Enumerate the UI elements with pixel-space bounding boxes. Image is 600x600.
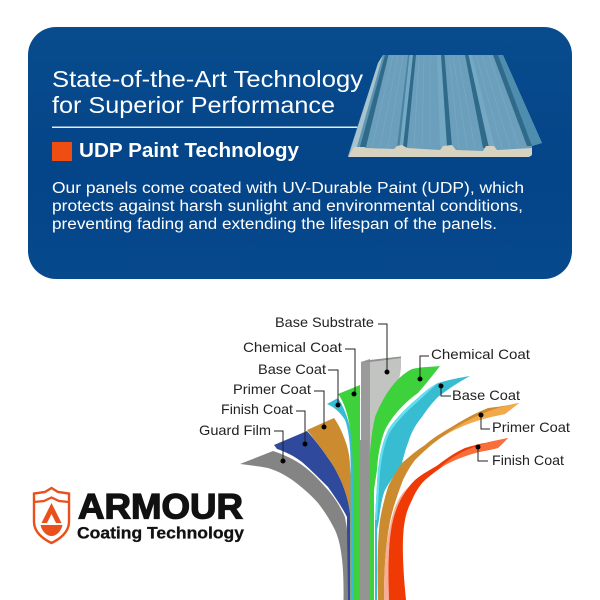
text block: description: preventing fading and extending the lifespan of the panels. xyxy=(52,216,497,233)
callout: Finish Coat left: Finish Coat xyxy=(221,401,293,417)
layer: chemical coat right xyxy=(369,366,440,600)
illustration: roof panel xyxy=(348,55,542,157)
layer: primer coat left xyxy=(307,418,352,600)
panel: UDP paint technology xyxy=(28,27,572,279)
wordmark: Coating Technology: Coating Technology xyxy=(77,524,245,542)
callout: Base Coat right xyxy=(438,384,520,403)
wordmark: ARMOUR: ARMOUR xyxy=(78,488,243,526)
callout: Chemical Coat right: Chemical Coat xyxy=(431,346,530,362)
callout: Primer Coat left xyxy=(233,381,326,430)
callout: Primer Coat right: Primer Coat xyxy=(492,419,570,435)
layer: chemical coat left xyxy=(338,385,360,600)
text block: description: Our panels come coated with UV-Durable Paint (UDP), which xyxy=(52,180,524,197)
callout: Guard Film xyxy=(199,422,286,464)
heading: panel title: State-of-the-Art Technology xyxy=(52,66,364,92)
callout: Primer Coat left: Primer Coat xyxy=(233,381,311,397)
ribs xyxy=(357,55,542,148)
heading: panel title: for Superior Performance xyxy=(52,92,335,118)
icon: shield xyxy=(34,488,69,543)
callout: Base Coat left: Base Coat xyxy=(258,361,326,377)
chart: coating layers diagram xyxy=(199,314,570,600)
callout: Base Coat left xyxy=(258,361,340,408)
callout: Finish Coat right: Finish Coat xyxy=(492,452,564,468)
layer: finish coat right xyxy=(384,438,508,600)
callout: Finish Coat right xyxy=(476,444,564,468)
callout: Chemical Coat left xyxy=(243,339,356,396)
callout: Finish Coat left xyxy=(221,401,308,446)
callout: Chemical Coat left: Chemical Coat xyxy=(243,339,342,355)
heading: panel title xyxy=(52,66,364,118)
callout: Base Coat right: Base Coat xyxy=(452,387,520,403)
layer: guard film xyxy=(240,451,348,600)
layer: base coat left xyxy=(327,398,353,600)
divider line xyxy=(52,126,360,128)
layer: primer coat right xyxy=(378,403,519,600)
icon: orange square xyxy=(52,142,72,161)
callout: Base Substrate: Base Substrate xyxy=(275,314,374,330)
callout: Guard Film: Guard Film xyxy=(199,422,271,438)
callout: Primer Coat right xyxy=(478,412,570,435)
text block: description xyxy=(52,180,524,233)
logo: Armour Coating Technology xyxy=(34,488,245,543)
layer: base coat right xyxy=(375,376,470,600)
layer: finish coat left xyxy=(274,431,350,600)
callout: Chemical Coat right xyxy=(418,346,530,382)
callout: Base Substrate xyxy=(275,314,390,374)
heading: UDP Paint Technology: UDP Paint Technology xyxy=(79,139,300,162)
text block: description: protects against harsh sunlight and environmental conditions, xyxy=(52,198,523,215)
layer: base substrate xyxy=(360,356,401,600)
